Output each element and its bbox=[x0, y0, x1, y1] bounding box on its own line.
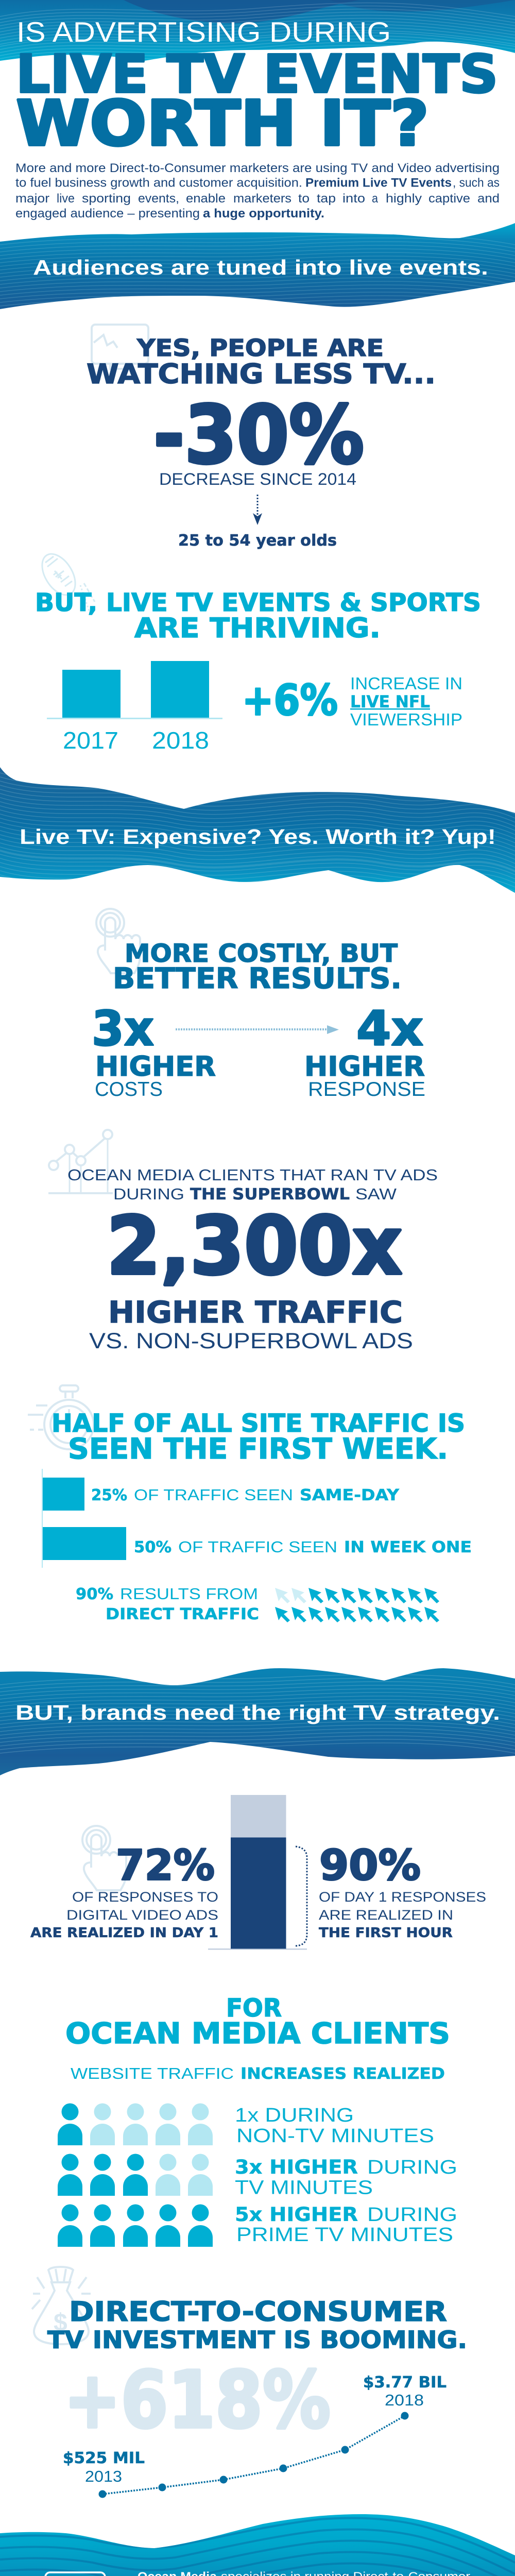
intro paragraph: and bbox=[477, 192, 500, 206]
stat: 72 percent bbox=[30, 1841, 218, 1941]
intro paragraph: marketers bbox=[233, 192, 291, 206]
heading: MORE COSTLY, BUT bbox=[125, 939, 398, 968]
row 2 caption: 3x HIGHER bbox=[235, 2156, 358, 2178]
row 1 caption: 1x DURING bbox=[235, 2105, 354, 2126]
footer wave panel bbox=[0, 2514, 515, 2576]
icon: money bag: $ bbox=[54, 2309, 67, 2336]
section: dtc investment bbox=[47, 2296, 467, 2498]
stat: 4x higher response: 4x bbox=[356, 1001, 423, 1056]
intro paragraph: engaged audience – presenting bbox=[15, 207, 200, 221]
label: 2018 value bbox=[363, 2374, 447, 2409]
lead-in text: SAW bbox=[355, 1185, 397, 1203]
icon: monitor and phone video bbox=[45, 2572, 115, 2576]
cursor pictogram bbox=[275, 1588, 439, 1622]
lead-in text bbox=[67, 1166, 438, 1204]
stat caption: DECREASE SINCE 2014 bbox=[159, 470, 356, 488]
direct traffic caption: 90% bbox=[76, 1585, 113, 1603]
section: live tv thriving bbox=[35, 588, 481, 754]
company description bbox=[137, 2570, 470, 2576]
intro paragraph: a bbox=[372, 192, 379, 206]
intro paragraph: sporting bbox=[82, 192, 131, 206]
horizontal bar chart: OF TRAFFIC SEEN bbox=[178, 1538, 337, 1556]
row 3 caption: 5x HIGHER bbox=[235, 2204, 358, 2226]
people pictogram: row 3 bbox=[58, 2204, 213, 2247]
intro paragraph: events, bbox=[138, 192, 179, 206]
intro paragraph: captive bbox=[428, 192, 470, 206]
row 2 caption: TV MINUTES bbox=[235, 2177, 373, 2199]
heading: DIRECT-TO-CONSUMER bbox=[69, 2296, 447, 2328]
wave band: audiences bbox=[0, 222, 515, 313]
bar chart: 2018 bbox=[152, 727, 209, 754]
icon: money bag bbox=[32, 2267, 91, 2344]
label: 2013 value bbox=[63, 2449, 145, 2485]
stat: plus six percent: +6% bbox=[242, 676, 338, 725]
banner heading: BUT, brands need the right TV strategy. bbox=[15, 1701, 500, 1724]
intro paragraph: enable bbox=[186, 192, 226, 206]
icon: tapping hand bbox=[96, 909, 140, 973]
wave band: tv strategy bbox=[0, 1667, 515, 1777]
title line: live tv events: LIVE TV EVENTS bbox=[16, 44, 498, 105]
intro paragraph: Premium Live TV Events bbox=[305, 176, 452, 190]
horizontal bar chart: SAME-DAY bbox=[300, 1486, 400, 1504]
stat: 3x higher costs: 3x bbox=[92, 1001, 154, 1056]
section: responses bbox=[30, 1795, 486, 1950]
stat caption: HIGHER TRAFFIC bbox=[108, 1295, 403, 1330]
horizontal bar chart bbox=[42, 1469, 472, 1568]
row 1 caption: NON-TV MINUTES bbox=[236, 2125, 434, 2147]
subheading: WEBSITE TRAFFIC bbox=[71, 2064, 234, 2082]
stat: 90 percent: ARE REALIZED IN bbox=[319, 1907, 453, 1923]
direct traffic caption bbox=[76, 1585, 259, 1623]
stat: 90 percent: 90% bbox=[319, 1841, 421, 1890]
intro paragraph: highly bbox=[386, 192, 422, 206]
intro paragraph: major bbox=[15, 192, 49, 206]
subheading bbox=[71, 2064, 445, 2083]
stat: 72 percent: OF RESPONSES TO bbox=[72, 1889, 218, 1905]
bracket bbox=[296, 1846, 307, 1946]
big stat: -30% bbox=[153, 388, 364, 482]
icon: monitor with falling line bbox=[92, 325, 148, 369]
lead-in text: DURING bbox=[113, 1185, 184, 1203]
stat: 72 percent: DIGITAL VIDEO ADS bbox=[66, 1907, 218, 1923]
intro paragraph: tap bbox=[317, 192, 336, 206]
lead-in text: OCEAN MEDIA CLIENTS THAT RAN TV ADS bbox=[67, 1166, 438, 1184]
heading: YES, PEOPLE ARE bbox=[136, 334, 384, 362]
label: 2013 value: 2013 bbox=[85, 2467, 122, 2485]
row 2 caption bbox=[235, 2156, 457, 2199]
stat caption: LIVE NFL bbox=[350, 692, 430, 711]
intro paragraph bbox=[15, 161, 500, 221]
icon: stopwatch bbox=[28, 1385, 94, 1449]
label: 2018 value: 2018 bbox=[385, 2391, 424, 2409]
arrow down bbox=[253, 495, 262, 525]
intro paragraph: to bbox=[298, 192, 310, 206]
banner heading: Audiences are tuned into live events. bbox=[33, 256, 488, 279]
big stat: 2,300x bbox=[107, 1199, 402, 1293]
wave band: title header bbox=[0, 0, 515, 61]
age range: 25 to 54 year olds bbox=[178, 532, 337, 550]
stat caption: VIEWERSHIP bbox=[350, 710, 462, 729]
row 1 caption bbox=[235, 2105, 434, 2147]
stat: 90 percent: THE FIRST HOUR bbox=[319, 1925, 453, 1941]
section: half of traffic: SEEN THE FIRST WEEK. bbox=[68, 1432, 448, 1465]
stat: 4x higher response: RESPONSE bbox=[308, 1078, 425, 1100]
section: live tv thriving: ARE THRIVING. bbox=[134, 613, 381, 644]
label: 2018 value: $3.77 BIL bbox=[363, 2374, 447, 2392]
row 3 caption: DURING bbox=[367, 2204, 457, 2226]
horizontal bar chart: IN WEEK ONE bbox=[344, 1538, 472, 1556]
direct traffic caption: DIRECT TRAFFIC bbox=[106, 1605, 259, 1623]
stat: 3x higher costs bbox=[92, 1001, 216, 1100]
line chart bbox=[99, 2412, 409, 2498]
section: less tv: WATCHING LESS TV... bbox=[87, 359, 436, 390]
horizontal bar chart: 50% bbox=[134, 1538, 171, 1556]
intro paragraph: live bbox=[57, 192, 75, 206]
intro paragraph: , such as bbox=[453, 176, 500, 190]
intro paragraph: More and more Direct-to-Consumer marketers are using TV and Video advertising bbox=[15, 161, 500, 175]
big background stat: +618% bbox=[64, 2354, 331, 2446]
heading: FOR bbox=[226, 1994, 282, 2023]
horizontal bar chart: 25% bbox=[91, 1486, 127, 1504]
section: less tv bbox=[87, 334, 436, 550]
horizontal bar chart: OF TRAFFIC SEEN bbox=[134, 1486, 293, 1504]
stat: 90 percent: OF DAY 1 RESPONSES bbox=[319, 1889, 486, 1905]
heading: HALF OF ALL SITE TRAFFIC IS bbox=[52, 1409, 465, 1438]
banner heading: Live TV: Expensive? Yes. Worth it? Yup! bbox=[20, 825, 496, 849]
stacked column bbox=[208, 1795, 307, 1950]
title bbox=[16, 16, 498, 160]
stat caption: INCREASE IN bbox=[350, 674, 462, 693]
heading: BUT, LIVE TV EVENTS & SPORTS bbox=[35, 588, 481, 617]
section: dtc investment: TV INVESTMENT IS BOOMING. bbox=[47, 2326, 467, 2353]
arrow right bbox=[176, 1025, 339, 1034]
stat: 72 percent: 72% bbox=[116, 1841, 215, 1890]
lead-in text: THE SUPERBOWL bbox=[190, 1185, 350, 1204]
title line: worth it: WORTH IT? bbox=[16, 88, 429, 160]
direct traffic caption: RESULTS FROM bbox=[120, 1585, 258, 1603]
section: superbowl: VS. NON-SUPERBOWL ADS bbox=[89, 1329, 413, 1353]
bar chart bbox=[47, 661, 222, 754]
stat: 4x higher response: HIGHER bbox=[304, 1051, 425, 1082]
icon: football bbox=[36, 548, 95, 615]
section: ocean media clients: OCEAN MEDIA CLIENTS bbox=[65, 2017, 450, 2050]
row 3 caption: PRIME TV MINUTES bbox=[236, 2224, 453, 2246]
label: 2013 value: $525 MIL bbox=[63, 2449, 145, 2467]
stat: 90 percent bbox=[319, 1841, 486, 1941]
wave band: live tv bbox=[0, 767, 515, 893]
row 2 caption: DURING bbox=[367, 2157, 457, 2178]
intro paragraph: to fuel business growth and customer acquisition. bbox=[15, 176, 302, 190]
icon: line chart bbox=[48, 1130, 113, 1193]
bar chart: 2017 bbox=[63, 727, 118, 754]
intro paragraph: a huge opportunity. bbox=[203, 207, 324, 221]
subheading: INCREASES REALIZED bbox=[241, 2065, 445, 2083]
stat: 3x higher costs: COSTS bbox=[95, 1078, 163, 1100]
section: more costly: BETTER RESULTS. bbox=[113, 962, 402, 995]
section: half of traffic bbox=[42, 1409, 472, 1623]
title kicker: IS ADVERTISING DURING bbox=[16, 16, 391, 48]
stat: 3x higher costs: HIGHER bbox=[95, 1051, 216, 1082]
people pictogram: row 1 bbox=[58, 2103, 213, 2145]
people pictogram: row 2 bbox=[58, 2154, 213, 2196]
stat: 72 percent: ARE REALIZED IN DAY 1 bbox=[30, 1925, 218, 1941]
stat caption bbox=[350, 674, 462, 729]
row 3 caption bbox=[235, 2204, 457, 2246]
stat: 4x higher response bbox=[304, 1001, 425, 1100]
section: more costly bbox=[92, 939, 425, 1100]
intro paragraph: into bbox=[342, 192, 365, 206]
icon: tapping hand bbox=[82, 1826, 126, 1890]
section: superbowl bbox=[67, 1166, 438, 1353]
section: ocean media clients bbox=[58, 1994, 457, 2247]
